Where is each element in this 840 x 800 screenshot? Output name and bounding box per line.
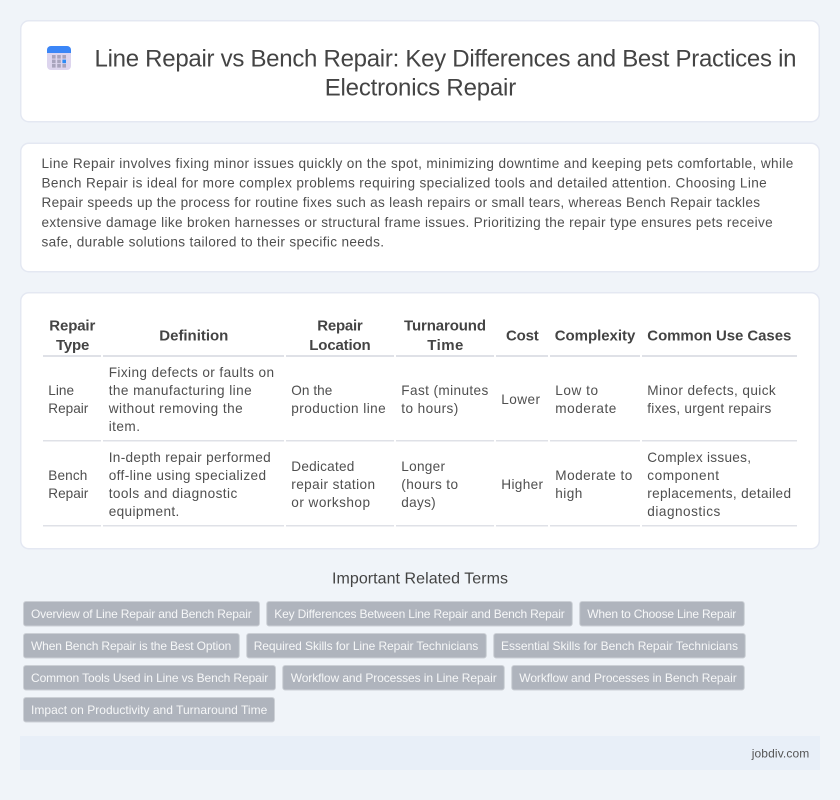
table row: bench repair: high [555,486,582,501]
table row: bench repair [48,450,791,519]
table row: line repair: moderate [555,401,616,416]
table header row: Type [56,337,89,354]
chip: workflow bench repair [512,666,744,690]
chip: productivity: Impact on Productivity and Turnaround Time [31,703,268,717]
intro text block: safe, durable solutions tailored to their specific needs. [42,234,384,249]
table row: line repair: Line [48,383,74,398]
chip: key differences [267,602,572,626]
footer bar [20,736,820,770]
chip: workflow bench repair: Workflow and Processes in Bench Repair [519,671,737,685]
table row: bench repair: diagnostics [647,504,721,519]
chip: bench repair skills: Essential Skills for Bench Repair Technicians [501,639,738,653]
table row: line repair: Lower [501,392,540,407]
chip: productivity [24,698,274,722]
table row: bench repair: tools and diagnostic [109,486,238,501]
table header row: Complexity [555,328,636,344]
table header row: Location [309,337,371,354]
table row: line repair: Low to [555,383,598,398]
heading: important related terms: Important Related Terms [332,571,508,588]
table header row: Time [427,337,463,354]
chip: bench repair skills [494,634,745,658]
table row: bench repair: Longer [401,459,445,474]
table row: bench repair: days) [401,495,436,510]
table row: bench repair: Complex issues, [647,450,751,465]
chip: key differences: Key Differences Between Line Repair and Bench Repair [274,607,565,621]
table header row: Turnaround [404,318,486,335]
chip: common tools: Common Tools Used in Line vs Bench Repair [31,671,268,685]
table header row: Cost [506,328,539,344]
panel: related term chips [24,602,745,722]
table row: bench repair: In-depth repair performed [109,450,271,465]
chip: when bench repair [24,634,239,658]
table header row: Definition [159,328,228,344]
table header row: Common Use Cases [647,328,791,344]
table row: line repair: Fast (minutes [401,383,489,398]
chip: workflow line repair: Workflow and Processes in Line Repair [291,671,497,685]
table row: line repair: fixes, urgent repairs [647,401,772,416]
intro text block: Repair speeds up the process for routine fixes such as leash repairs or small tears, whereas Bench Repair tackles [42,195,760,210]
table row: bench repair: Dedicated [291,459,354,474]
panel: header card [21,21,819,122]
title: Electronics Repair [325,74,516,102]
footer source: jobdiv.com [751,746,809,760]
table row: line repair: the manufacturing line [109,383,252,398]
table row: bench repair: replacements, detailed [647,486,791,501]
table row: bench repair: Repair [48,486,89,501]
chip: overview: Overview of Line Repair and Bench Repair [31,607,252,621]
table row: bench repair: Bench [48,468,87,483]
intro text block: extensive damage like broken harnesses or structural frame issues. Prioritizing the repair type ensures pets receive [42,215,773,230]
table row: bench repair: Higher [501,477,543,492]
table row: bench repair: or workshop [291,495,370,510]
table row: bench repair: repair station [291,477,375,492]
chip: when to choose [580,602,744,626]
table row: line repair: Fixing defects or faults on [109,365,274,380]
chip: workflow line repair [283,666,504,690]
title: Line Repair vs Bench Repair: Key Differences and Best Practices in [94,46,796,72]
panel: comparison table card [21,293,819,549]
table row: line repair: On the [291,383,332,398]
table row: bench repair: equipment. [109,504,179,519]
table row: bench repair: off-line using specialized [109,468,266,483]
chip: line repair skills: Required Skills for Line Repair Technicians [254,639,478,653]
icon: calendar [47,46,71,70]
table header row: Repair [49,318,95,335]
title [94,46,796,102]
chip: common tools [24,666,276,690]
panel: intro paragraph card [21,143,819,272]
table row: line repair: Minor defects, quick [647,383,776,398]
chip: when bench repair: When Bench Repair is the Best Option [31,639,231,653]
table row: bench repair: (hours to [401,477,458,492]
intro text block [42,156,793,249]
table row: bench repair: Moderate to [555,468,632,483]
chip: line repair skills [247,634,486,658]
table row: line repair: without removing the [108,401,243,416]
table row: line repair: Repair [48,401,89,416]
table row: line repair: item. [109,419,140,434]
table row: bench repair: component [647,468,719,483]
table row: line repair [48,365,776,434]
chip: when to choose: When to Choose Line Repair [587,607,736,621]
table header row: Repair [317,318,363,335]
intro text block: Bench Repair is ideal for more complex problems requiring specialized tools and detailed attention. Choosing Line [42,176,767,191]
table row: line repair: to hours) [401,401,458,416]
chip: overview [24,602,260,626]
intro text block: Line Repair involves fixing minor issues quickly on the spot, minimizing downtime and keeping pets comfortable, while [42,156,793,171]
table row: line repair: production line [291,401,386,416]
table header row [49,318,791,354]
